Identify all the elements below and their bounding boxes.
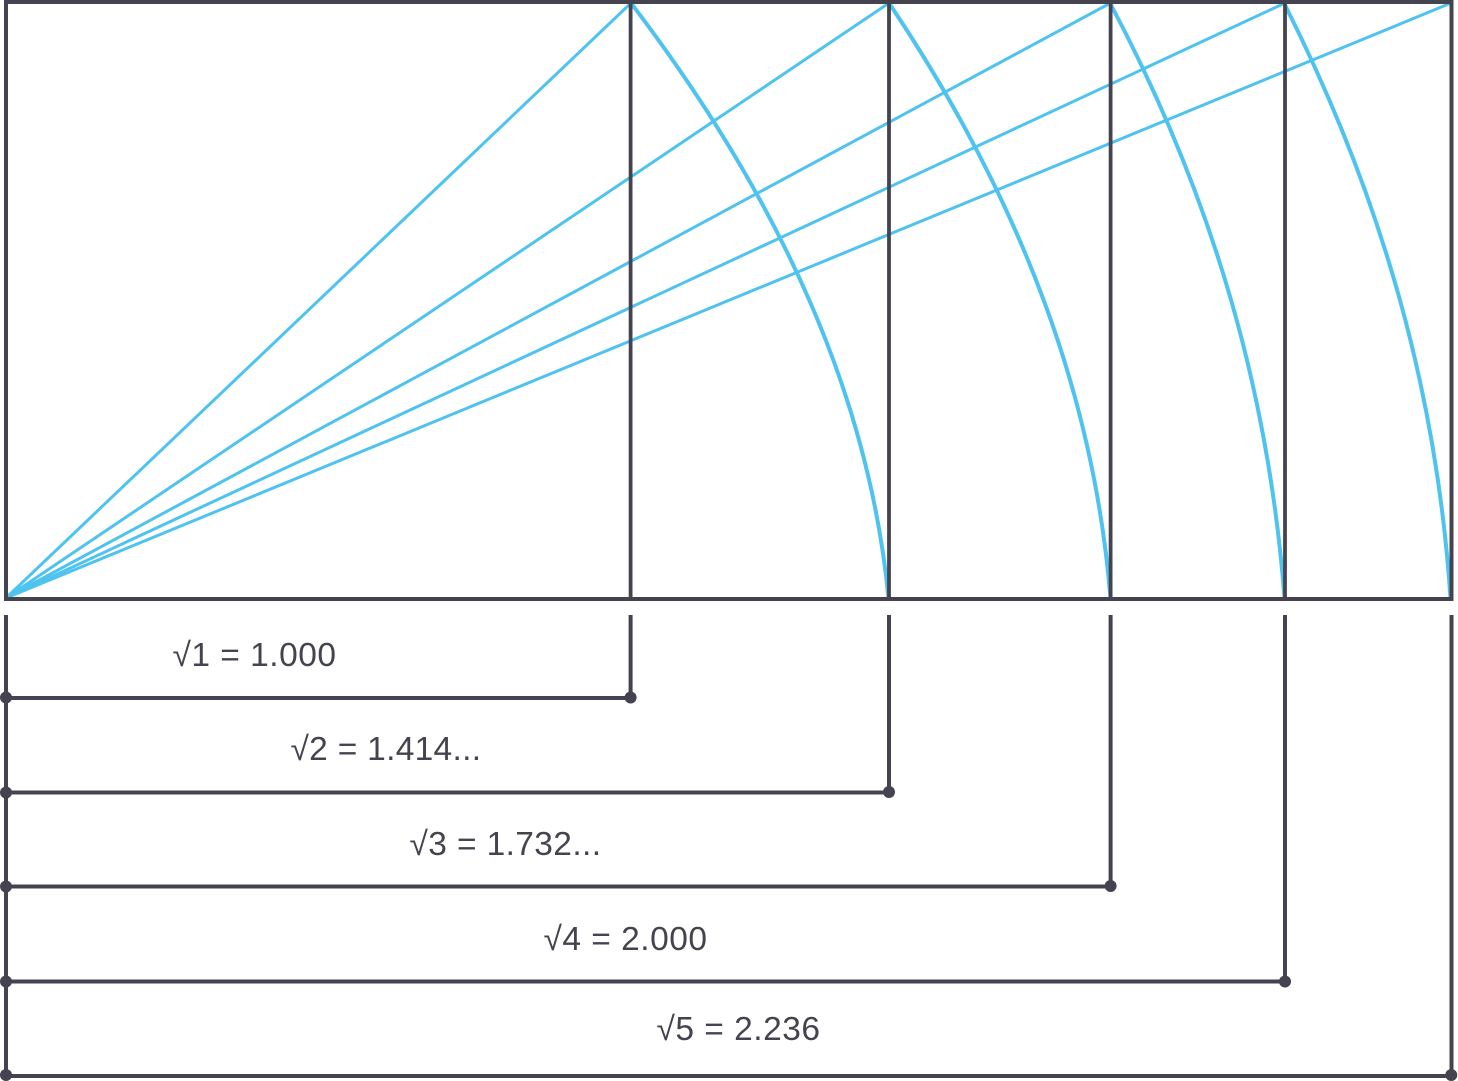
dimension: root 4 [0, 615, 1291, 988]
dimension: root 2: √2 = 1.414... [290, 731, 481, 768]
dimension: root 2 [0, 615, 895, 798]
dimension: root 3: √3 = 1.732... [410, 826, 601, 863]
dimension: root 1: √1 = 1.000 [172, 637, 336, 674]
swing arcs [631, 3, 1450, 598]
dimension: root 4: √4 = 2.000 [544, 921, 707, 958]
diagonals from the origin [6, 3, 1451, 598]
dimension: root 1 [0, 615, 637, 704]
dimension: root 5: √5 = 2.236 [656, 1011, 820, 1048]
rectangle frame with nested root rectangles [6, 2, 1452, 599]
dimension: root 3 [0, 615, 1117, 892]
dimension: root 5 [0, 615, 1457, 1081]
